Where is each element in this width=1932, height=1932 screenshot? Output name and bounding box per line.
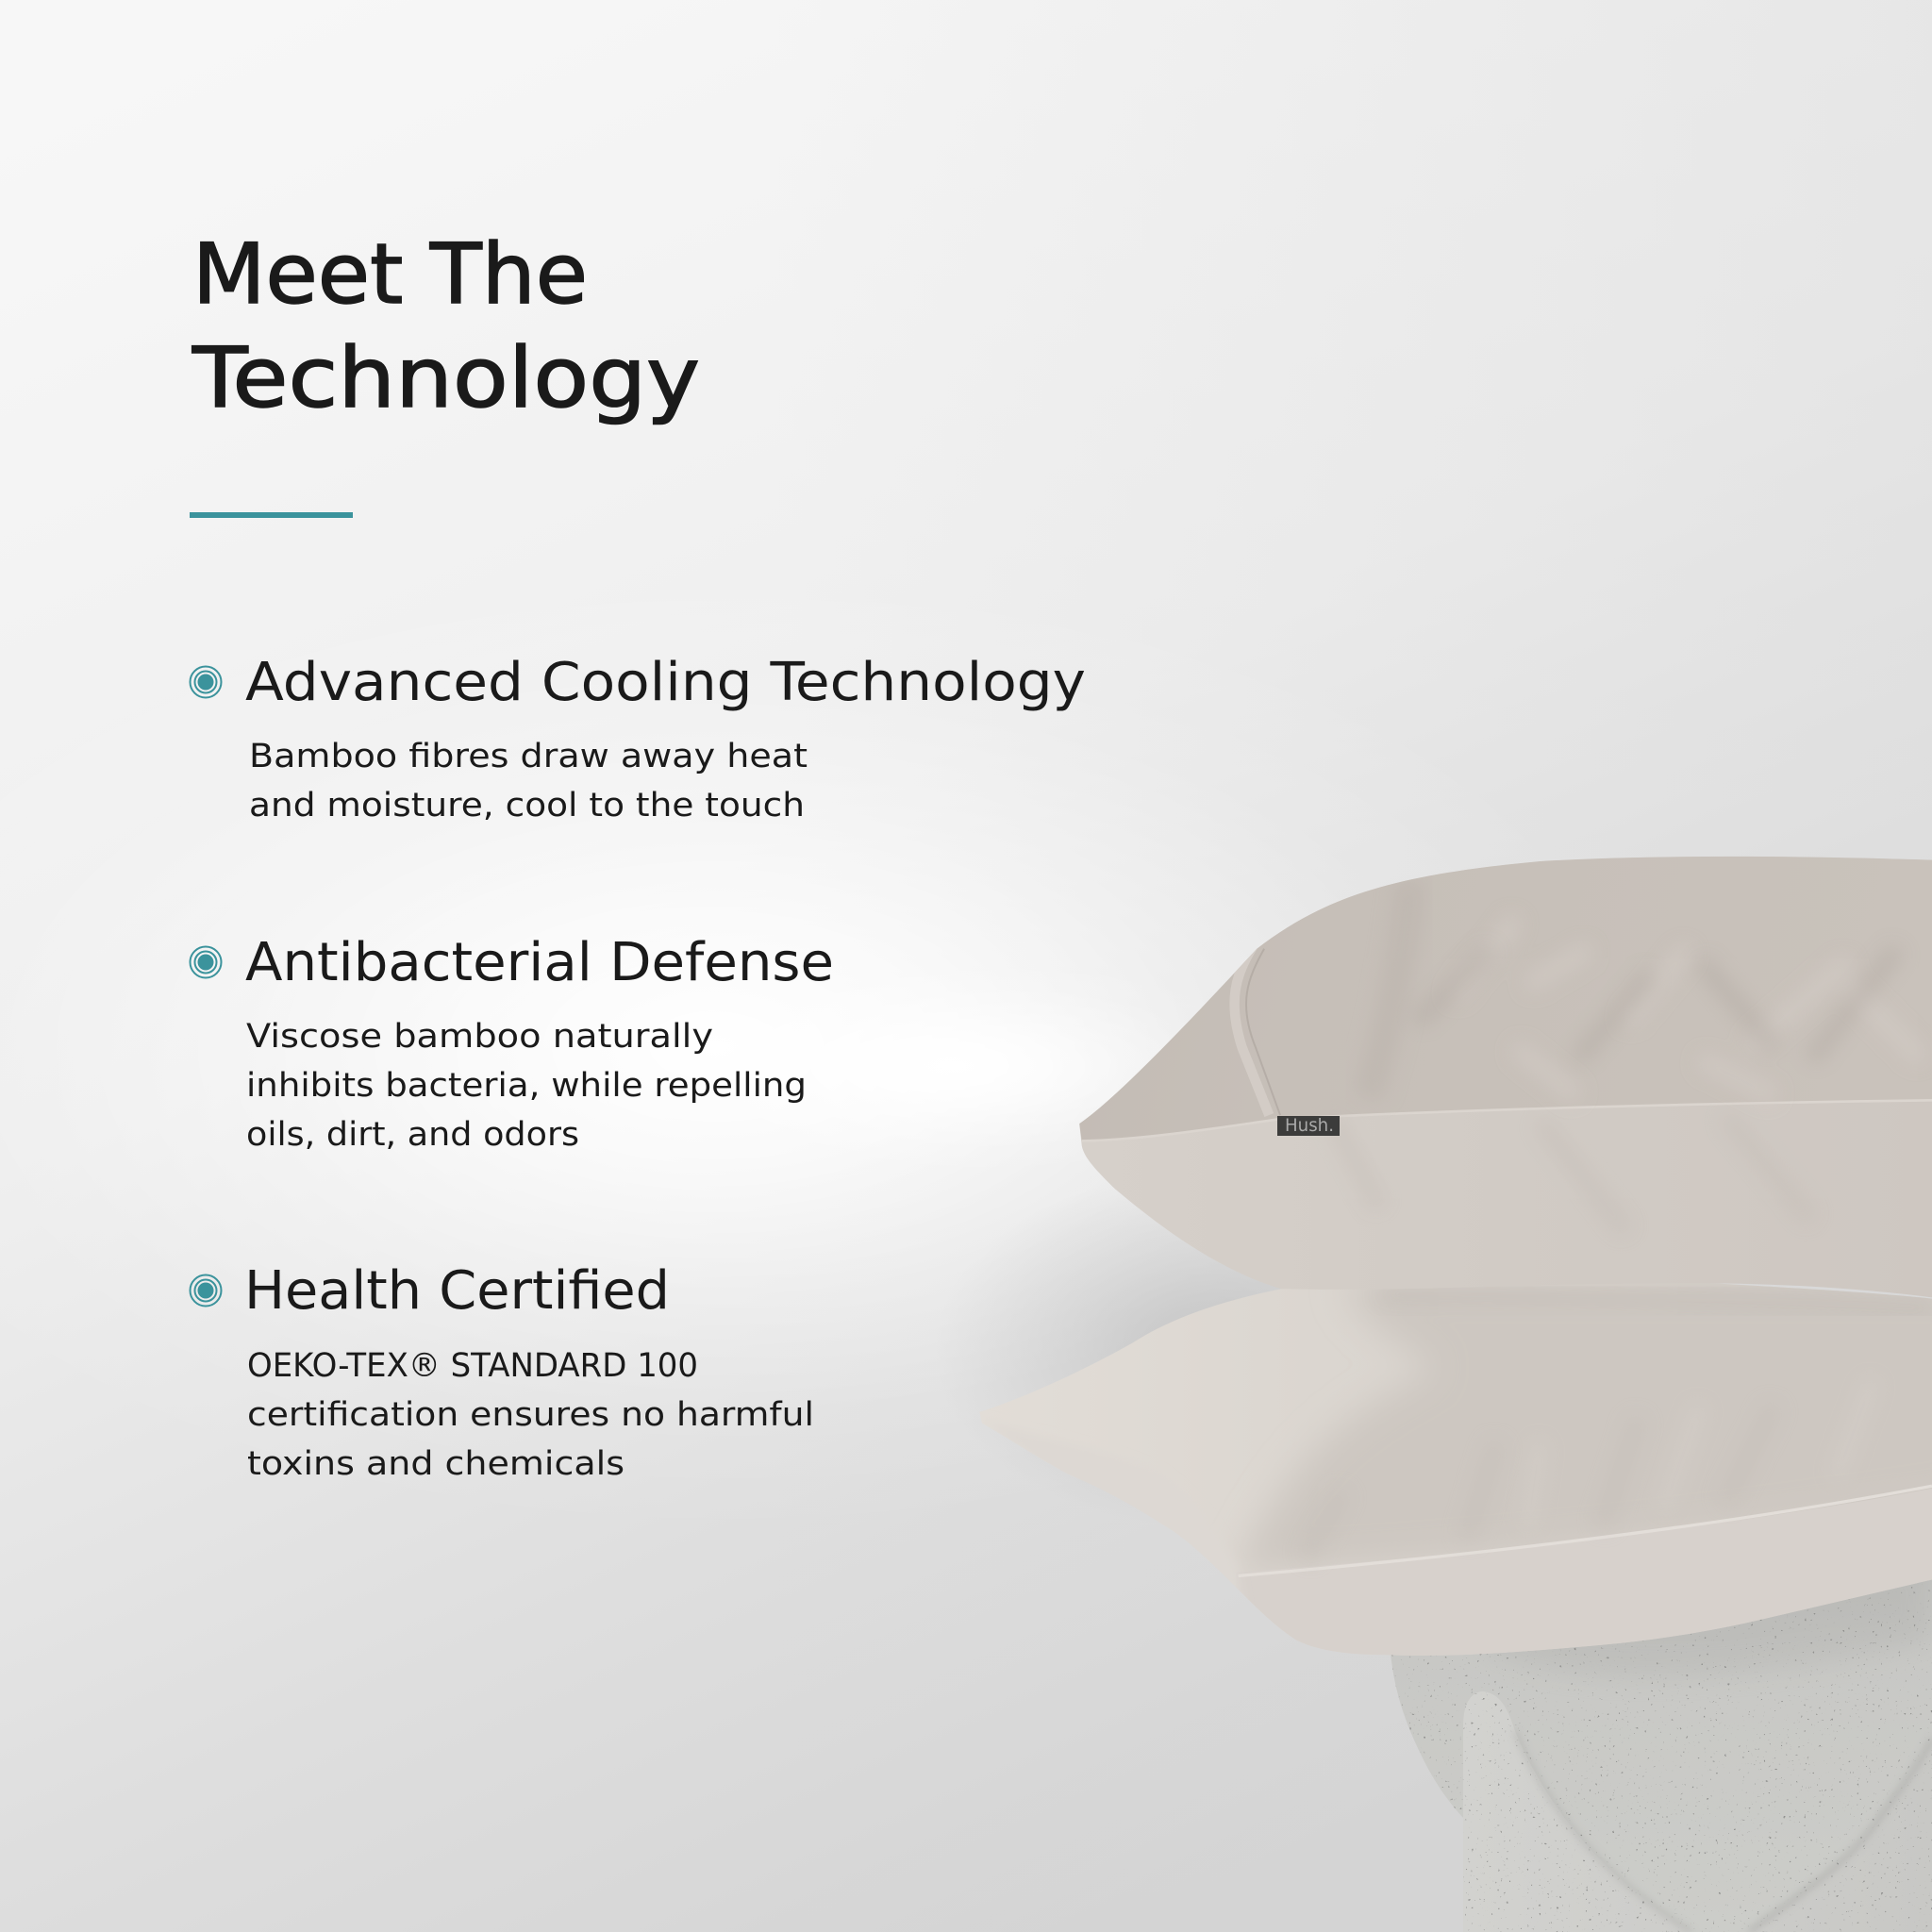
item: advanced cooling xyxy=(191,652,1086,824)
item: health certified xyxy=(191,1260,814,1483)
title xyxy=(192,225,700,426)
heading: Antibacterial Defense xyxy=(245,932,834,993)
title divider xyxy=(190,512,353,518)
stool: concrete sculpture xyxy=(1390,1528,1932,1932)
description xyxy=(246,1018,807,1154)
lower pillow xyxy=(979,1280,1932,1675)
item: antibacterial defense xyxy=(191,932,834,1154)
pillow shaded panel xyxy=(1251,1289,1854,1569)
pillow top panel xyxy=(1079,857,1839,1140)
description: OEKO-TEX® STANDARD 100 xyxy=(247,1347,698,1385)
description: oils, dirt, and odors xyxy=(246,1116,579,1154)
description: and moisture, cool to the touch xyxy=(249,787,805,824)
description xyxy=(247,1347,814,1483)
title: Technology xyxy=(192,329,700,426)
description: Viscose bamboo naturally xyxy=(246,1018,713,1056)
upper pillow xyxy=(1079,857,1932,1297)
description: toxins and chemicals xyxy=(247,1445,625,1483)
pillow lower band xyxy=(1431,1489,1932,1656)
description: inhibits bacteria, while repelling xyxy=(246,1067,807,1105)
stool leg xyxy=(1463,1691,1932,1932)
icon: target bullet xyxy=(191,1275,221,1306)
description: certification ensures no harmful xyxy=(247,1396,814,1434)
heading: Health Certified xyxy=(244,1260,670,1322)
title: Meet The xyxy=(192,225,588,323)
brand tag: Hush. xyxy=(1285,1115,1334,1136)
heading: Advanced Cooling Technology xyxy=(245,652,1086,713)
description: Bamboo fibres draw away heat xyxy=(249,738,808,775)
icon: target bullet xyxy=(191,666,221,698)
description xyxy=(249,738,808,824)
icon: target bullet xyxy=(191,947,221,977)
